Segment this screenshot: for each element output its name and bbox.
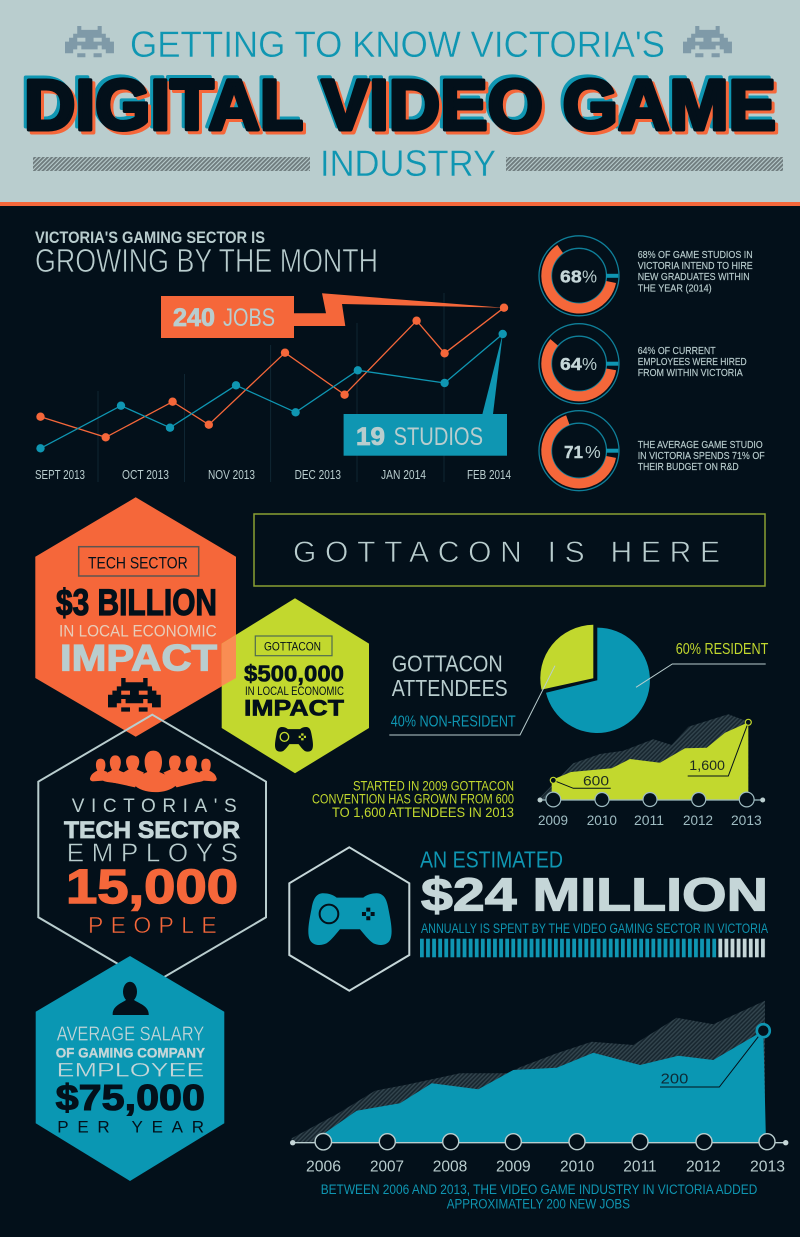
- text: victoria's: VICTORIA'S: [72, 796, 237, 817]
- text: 71 percent description: THE AVERAGE GAME STUDIO: [638, 439, 763, 451]
- progress bars: [420, 939, 767, 957]
- panel: tech sector hexagon: [35, 497, 236, 737]
- heading: gottacon attendees: [392, 651, 508, 701]
- chart axis labels: OCT 2013: [122, 468, 169, 482]
- area chart: new jobs: 200: [661, 1070, 688, 1087]
- stat: 75,000: $75,000: [56, 1077, 205, 1118]
- area chart: attendees: [538, 714, 765, 828]
- callout: 240 jobs: 240: [173, 304, 215, 332]
- callout: 240 jobs: JOBS: [223, 304, 275, 332]
- icon: person: [113, 982, 149, 1015]
- panel: 64 percent donut: [539, 324, 747, 404]
- area chart: attendees: 2010: [587, 812, 617, 828]
- text: started in 2009: STARTED IN 2009 GOTTACON: [353, 778, 514, 794]
- text: per year: PER YEAR: [57, 1117, 204, 1136]
- area chart: new jobs: 2006: [306, 1159, 341, 1176]
- panel: growth line chart: [35, 229, 511, 482]
- chart axis labels: FEB 2014: [467, 468, 511, 482]
- area chart: new jobs: 2013: [750, 1159, 785, 1176]
- panel: 24 million spend: [289, 846, 768, 991]
- panel: 64 percent donut: %: [582, 354, 597, 374]
- text: employee: EMPLOYEE: [57, 1061, 204, 1082]
- text: started in 2009: TO 1,600 ATTENDEES IN 2013: [332, 805, 514, 820]
- text: employs: EMPLOYS: [67, 838, 238, 868]
- text: 68 percent description: THE YEAR (2014): [638, 282, 712, 294]
- heading: gottacon attendees: ATTENDEES: [392, 675, 508, 701]
- panel: 68 percent donut: %: [582, 267, 597, 287]
- chart line: studios: [36, 330, 507, 452]
- title: industry: INDUSTRY: [320, 143, 496, 184]
- text: impact: IMPACT: [244, 696, 344, 721]
- text: an estimated: AN ESTIMATED: [420, 846, 563, 872]
- chart axis labels: SEPT 2013: [35, 468, 85, 482]
- icon: controller in hexagon: [289, 847, 409, 991]
- stat: 500,000: $500,000: [244, 661, 344, 687]
- text: 68 percent description: [638, 249, 753, 294]
- callout: 19 studios: STUDIOS: [394, 423, 483, 451]
- title: digital video game: DIGITAL VIDEO GAME: [21, 64, 773, 142]
- area chart: new jobs: 2012: [686, 1159, 721, 1176]
- text: 71 percent description: THEIR BUDGET ON R&D: [638, 461, 739, 473]
- chart line: jobs: [36, 304, 508, 441]
- tag: gottacon: [255, 636, 332, 656]
- chart axis labels: [35, 468, 511, 482]
- text: 64 percent description: FROM WITHIN VICTORIA: [638, 367, 743, 379]
- panel: average salary hexagon: [36, 956, 224, 1181]
- stat: 15,000: 15,000: [66, 861, 238, 914]
- text: 68 percent description: 68% OF GAME STUDIOS IN: [638, 249, 753, 261]
- area chart: new jobs: 2011: [623, 1159, 657, 1176]
- panel: 71 percent donut: 71: [564, 442, 583, 462]
- area chart: attendees: 2012: [683, 812, 713, 828]
- area chart: attendees: 2011: [634, 812, 664, 828]
- text: tech sector: TECH SECTOR: [64, 817, 240, 844]
- chart axis labels: NOV 2013: [208, 468, 255, 482]
- panel: 68 percent donut: 68: [560, 267, 582, 287]
- label: resident: 60% RESIDENT: [676, 641, 768, 658]
- area chart: new jobs: [290, 1001, 788, 1176]
- icon: black game controller: [275, 727, 313, 752]
- pie chart: [540, 625, 650, 733]
- text: started in 2009: CONVENTION HAS GROWN FROM 600: [312, 792, 514, 806]
- title: getting to know: GETTING TO KNOW VICTORIA'S: [130, 24, 665, 65]
- text: in local economic: IN LOCAL ECONOMIC: [245, 686, 344, 698]
- area chart: attendees: 600: [583, 773, 609, 789]
- area chart: new jobs: 2010: [560, 1159, 594, 1176]
- chart axis labels: DEC 2013: [295, 468, 341, 482]
- icon: right space invader: [683, 26, 732, 57]
- panel: tech sector employs hexagon: [38, 715, 266, 984]
- label: resident: [636, 641, 768, 687]
- panel: 71 percent donut: [539, 411, 765, 491]
- panel: gottacon hexagon: [222, 598, 369, 773]
- stat: 24 million: $24 MILLION: [421, 869, 768, 921]
- text: 68 percent description: VICTORIA INTEND TO HIRE: [638, 260, 753, 272]
- banner: gottacon is here: GOTTACON IS HERE: [293, 536, 720, 569]
- title: digital video game: DIGITAL VIDEO GAME: [27, 70, 779, 148]
- callout: 240 jobs: [161, 293, 504, 338]
- area chart: attendees: 2013: [731, 812, 762, 828]
- text: 71 percent description: [638, 439, 765, 473]
- icon: group of people: [90, 751, 217, 792]
- stat: 3 billion: $3 BILLION: [56, 582, 217, 623]
- area chart: new jobs: 2007: [370, 1159, 404, 1176]
- text: 71 percent description: IN VICTORIA SPENDS 71% OF: [638, 450, 765, 462]
- text: started in 2009: [312, 778, 514, 820]
- panel: 64 percent donut: 64: [560, 354, 582, 374]
- title: digital video game: DIGITAL VIDEO GAME: [24, 66, 776, 146]
- left hatched bar: [33, 157, 310, 171]
- icon: black space invader: [108, 678, 161, 712]
- text: 64 percent description: EMPLOYEES WERE HIRED: [638, 356, 747, 368]
- panel: header: [0, 0, 800, 206]
- text: of gaming company: OF GAMING COMPANY: [56, 1044, 206, 1060]
- tag: tech sector: TECH SECTOR: [88, 554, 188, 572]
- heading: gaming sector: VICTORIA'S GAMING SECTOR IS: [35, 229, 265, 247]
- caption: new jobs: [321, 1182, 758, 1211]
- banner: gottacon is here: [254, 514, 765, 586]
- label: non-resident: [389, 666, 555, 735]
- area chart: attendees: 2009: [538, 812, 568, 828]
- text: average salary: AVERAGE SALARY: [57, 1024, 204, 1046]
- panel: 71 percent donut: %: [585, 442, 601, 462]
- callout: 19 studios: 19: [356, 423, 385, 451]
- text: people: PEOPLE: [88, 912, 217, 938]
- area chart: new jobs: 2009: [496, 1159, 531, 1176]
- panel: 68 percent donut: [539, 236, 753, 316]
- label: non-resident: 40% NON-RESIDENT: [391, 714, 516, 731]
- heading: growing by the month: GROWING BY THE MONTH: [35, 242, 378, 279]
- tag: gottacon: GOTTACON: [264, 640, 321, 654]
- heading: gottacon attendees: GOTTACON: [392, 651, 503, 677]
- text: 64 percent description: 64% OF CURRENT: [638, 345, 716, 357]
- panel: gottacon attendees: [312, 625, 768, 828]
- tag: tech sector: [79, 547, 199, 576]
- area chart: attendees: 1,600: [689, 757, 725, 773]
- text: 64 percent description: [638, 345, 747, 379]
- text: in local economic: IN LOCAL ECONOMIC: [59, 622, 217, 641]
- icon: left space invader: [65, 26, 114, 57]
- area chart: new jobs: 2008: [433, 1159, 467, 1176]
- chart axis labels: JAN 2014: [381, 468, 426, 482]
- callout: 19 studios: [344, 334, 507, 456]
- text: impact: IMPACT: [60, 638, 217, 679]
- text: 68 percent description: NEW GRADUATES WITHIN: [638, 271, 750, 283]
- caption: new jobs: APPROXIMATELY 200 NEW JOBS: [447, 1196, 630, 1211]
- right hatched bar: [506, 157, 783, 171]
